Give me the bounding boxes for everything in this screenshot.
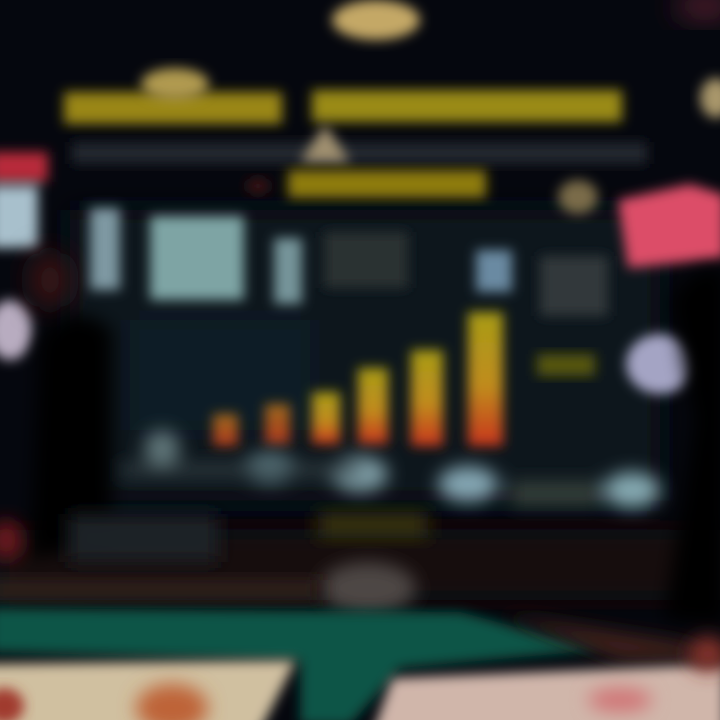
title dome lamp bbox=[141, 68, 209, 100]
background panel tone bbox=[0, 210, 720, 600]
table edge bbox=[0, 580, 320, 600]
red dot bbox=[246, 178, 270, 194]
red chip left bbox=[0, 688, 24, 720]
seated figure bbox=[320, 562, 416, 614]
screen 3 bbox=[274, 238, 302, 304]
bar 5 bbox=[411, 350, 443, 446]
cream card right bbox=[372, 664, 720, 720]
right panel bbox=[540, 256, 608, 316]
right lamp bbox=[700, 78, 720, 118]
top right red glow bbox=[675, 0, 720, 18]
text panel bbox=[324, 232, 408, 288]
bar 1 bbox=[213, 414, 238, 446]
screen 2 bbox=[150, 216, 244, 300]
poker table bbox=[0, 608, 600, 720]
right silhouette bbox=[664, 269, 720, 625]
red hand right bbox=[588, 636, 720, 712]
orange chip bbox=[136, 684, 208, 720]
small lamp right bbox=[558, 180, 598, 214]
screens row bbox=[90, 208, 608, 316]
cream card left bbox=[0, 660, 296, 720]
bar 2 bbox=[265, 404, 290, 444]
lower yellow label bbox=[318, 512, 428, 538]
left red blob bbox=[30, 252, 70, 308]
screen 1 bbox=[90, 208, 120, 290]
yellow label right bbox=[537, 354, 595, 376]
yellow subheading bbox=[288, 170, 486, 198]
left lower white glow bbox=[0, 300, 32, 360]
left bottom red bbox=[0, 520, 22, 560]
left flag bbox=[0, 152, 48, 248]
subtitle bbox=[72, 142, 647, 164]
bar 3 bbox=[312, 392, 340, 444]
lower grey block bbox=[68, 514, 218, 562]
centre cone lamp bbox=[300, 124, 350, 162]
bar 6 bbox=[468, 312, 503, 446]
pink sign right bbox=[618, 184, 720, 268]
screen 4 bbox=[476, 250, 512, 292]
right table edge bbox=[500, 614, 720, 660]
left silhouette bbox=[30, 315, 112, 560]
white figure right bbox=[626, 334, 694, 394]
bar chart bbox=[213, 312, 503, 446]
ceiling lamp top bbox=[332, 0, 420, 40]
title bbox=[64, 90, 622, 124]
bar base labels bbox=[120, 430, 660, 508]
bar 4 bbox=[358, 368, 388, 444]
